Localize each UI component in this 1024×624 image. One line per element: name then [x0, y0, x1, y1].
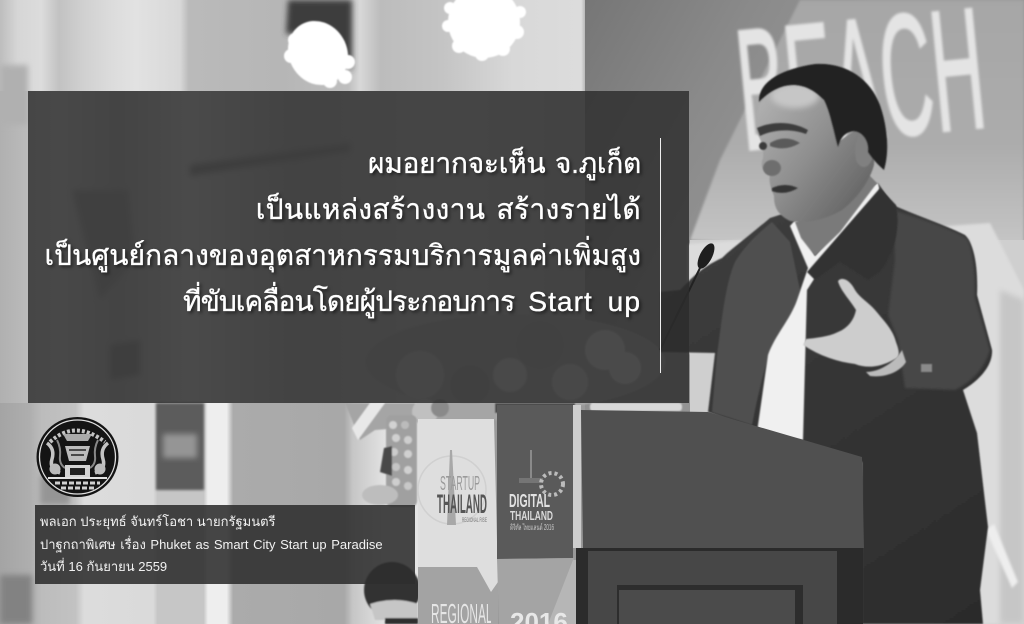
hand and cuff: [803, 279, 899, 367]
flower garland: [362, 415, 417, 507]
Start Up Thailand banner: [418, 419, 498, 624]
caption text: ปาฐกถาพิเศษ เรื่อง Phuket as Smart City Start up Paradise: [40, 536, 383, 552]
flowers below panel edge: [345, 403, 500, 440]
quote text: ผมอยากจะเห็น จ.ภูเก็ต: [368, 147, 641, 179]
Digital Thailand banner: [497, 405, 580, 624]
facial features: [757, 123, 873, 193]
stage spotlights: [276, 0, 526, 96]
drapes behind panel: [72, 143, 350, 380]
Digital Thailand banner: DIGITAL: [509, 491, 550, 511]
dark banner in background: [156, 403, 204, 490]
caption text: [40, 514, 383, 574]
flower arrangement: [345, 314, 682, 440]
quote text: เป็นแหล่งสร้างงาน สร้างรายได้: [256, 193, 641, 225]
jacket left front: [712, 222, 800, 425]
caption text: วันที่ 16 กันยายน 2559: [40, 559, 167, 574]
Digital Thailand banner: THAILAND: [510, 508, 553, 523]
shirt: [757, 183, 880, 440]
quote text: [44, 146, 642, 322]
jacket placket: [807, 188, 898, 280]
sleeve button: [921, 364, 932, 372]
neck: [795, 168, 877, 256]
background photo: stage scene with speaker: THAILAND: [437, 489, 487, 519]
vertical rule: [660, 138, 661, 373]
quote text: เป็นศูนย์กลางของอุตสาหกรรมบริการมูลค่าเพิ่มสูง: [44, 239, 641, 271]
jacket sleeve: [888, 210, 990, 390]
quote panel: [28, 91, 689, 403]
forehead highlight: [771, 84, 819, 108]
blurred right wall: [585, 0, 1024, 624]
dark sphere at foot of flowers: [364, 562, 420, 624]
face: [757, 78, 876, 222]
icon: Thai government emblem: [36, 417, 118, 497]
speaker: [660, 64, 992, 624]
caption text: พลเอก ประยุทธ์ จันทร์โอชา นายกรัฐมนตรี: [40, 514, 276, 529]
jacket: [660, 183, 992, 624]
hair: [759, 64, 887, 170]
Start Up Thailand banner: REGIONAL RISE: [462, 518, 487, 524]
quote text: ที่ขับเคลื่อนโดยผู้ประกอบการ Start up: [183, 285, 641, 317]
caption panel: [35, 505, 415, 584]
lectern: [573, 405, 864, 624]
Digital Thailand banner: ดิจิทัล ไทยแลนด์ 2016: [510, 522, 554, 532]
Start Up Thailand banner: STARTUP: [440, 473, 480, 495]
blurred background wall and drapes: [0, 0, 590, 624]
microphone: [660, 241, 718, 350]
